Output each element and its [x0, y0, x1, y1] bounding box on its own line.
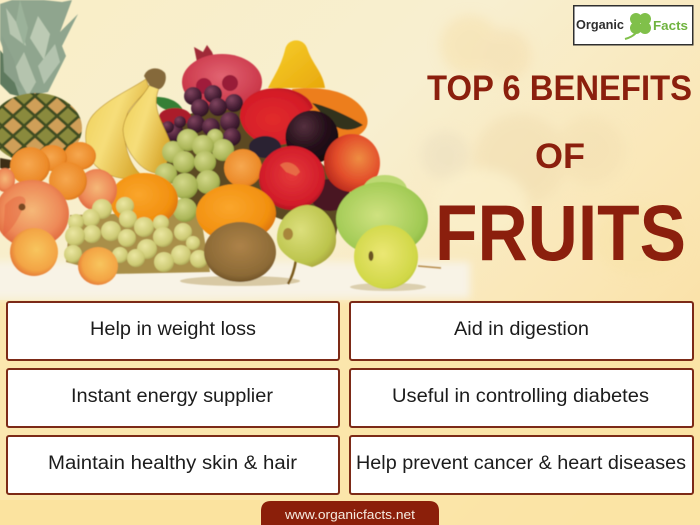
- benefit box: diabetes: Useful in controlling diabetes: [392, 386, 649, 407]
- papaya, yellow: [268, 40, 325, 88]
- benefit box: weight loss: Help in weight loss: [90, 319, 256, 340]
- papaya, cut half: [292, 88, 368, 143]
- pile backing shadows: [66, 100, 426, 291]
- footer url tab: www.organicfacts.net: [284, 507, 415, 522]
- apricot, centre: [224, 149, 262, 187]
- yellow apple: [354, 225, 441, 289]
- benefit box: energy: [7, 369, 339, 427]
- logo icon: clover: [625, 13, 651, 39]
- kiwi: [204, 222, 276, 282]
- green apple, large: [336, 182, 428, 256]
- benefit box: digestion: Aid in digestion: [454, 319, 589, 340]
- nectarine, centre: [259, 146, 325, 210]
- benefit box: cancer and heart: Help prevent cancer & heart diseases: [356, 453, 686, 474]
- bananas: [86, 68, 171, 178]
- dark plum, small: [249, 136, 281, 158]
- pineapple: [0, 0, 82, 170]
- benefit box: skin and hair: [7, 436, 339, 494]
- fruit pile illustration: [0, 0, 441, 291]
- benefit box: skin and hair: Maintain healthy skin & hair: [48, 453, 298, 474]
- pomegranate: [182, 45, 262, 110]
- title line: of: OF: [535, 137, 585, 176]
- leaf and berries: [152, 97, 191, 126]
- logo wordmark: Facts: Facts: [653, 18, 688, 33]
- apricot, front: [78, 247, 118, 285]
- benefit box: diabetes: [350, 369, 693, 427]
- green apple, back: [363, 175, 407, 205]
- benefit box: weight loss: [7, 302, 339, 360]
- orange, left: [110, 173, 178, 227]
- benefit box: energy: Instant energy supplier: [71, 386, 274, 407]
- logo wordmark: Organic: Organic: [576, 17, 624, 32]
- benefit box: cancer and heart: [350, 436, 693, 494]
- dark fruit under pile: [310, 179, 350, 211]
- pear: [277, 205, 336, 284]
- logo: [574, 6, 693, 45]
- dark grapes: [162, 75, 243, 146]
- nectarine, right: [324, 134, 380, 192]
- green grapes, upper cluster: [155, 129, 234, 222]
- plum: [286, 110, 338, 164]
- footer url tab: [261, 501, 439, 525]
- apricots and peaches, left: [0, 142, 117, 276]
- orange, centre: [196, 184, 276, 242]
- green grapes, lower cluster: [64, 197, 208, 272]
- red apple: [240, 88, 313, 145]
- title: [427, 69, 692, 277]
- benefit box: digestion: [350, 302, 693, 360]
